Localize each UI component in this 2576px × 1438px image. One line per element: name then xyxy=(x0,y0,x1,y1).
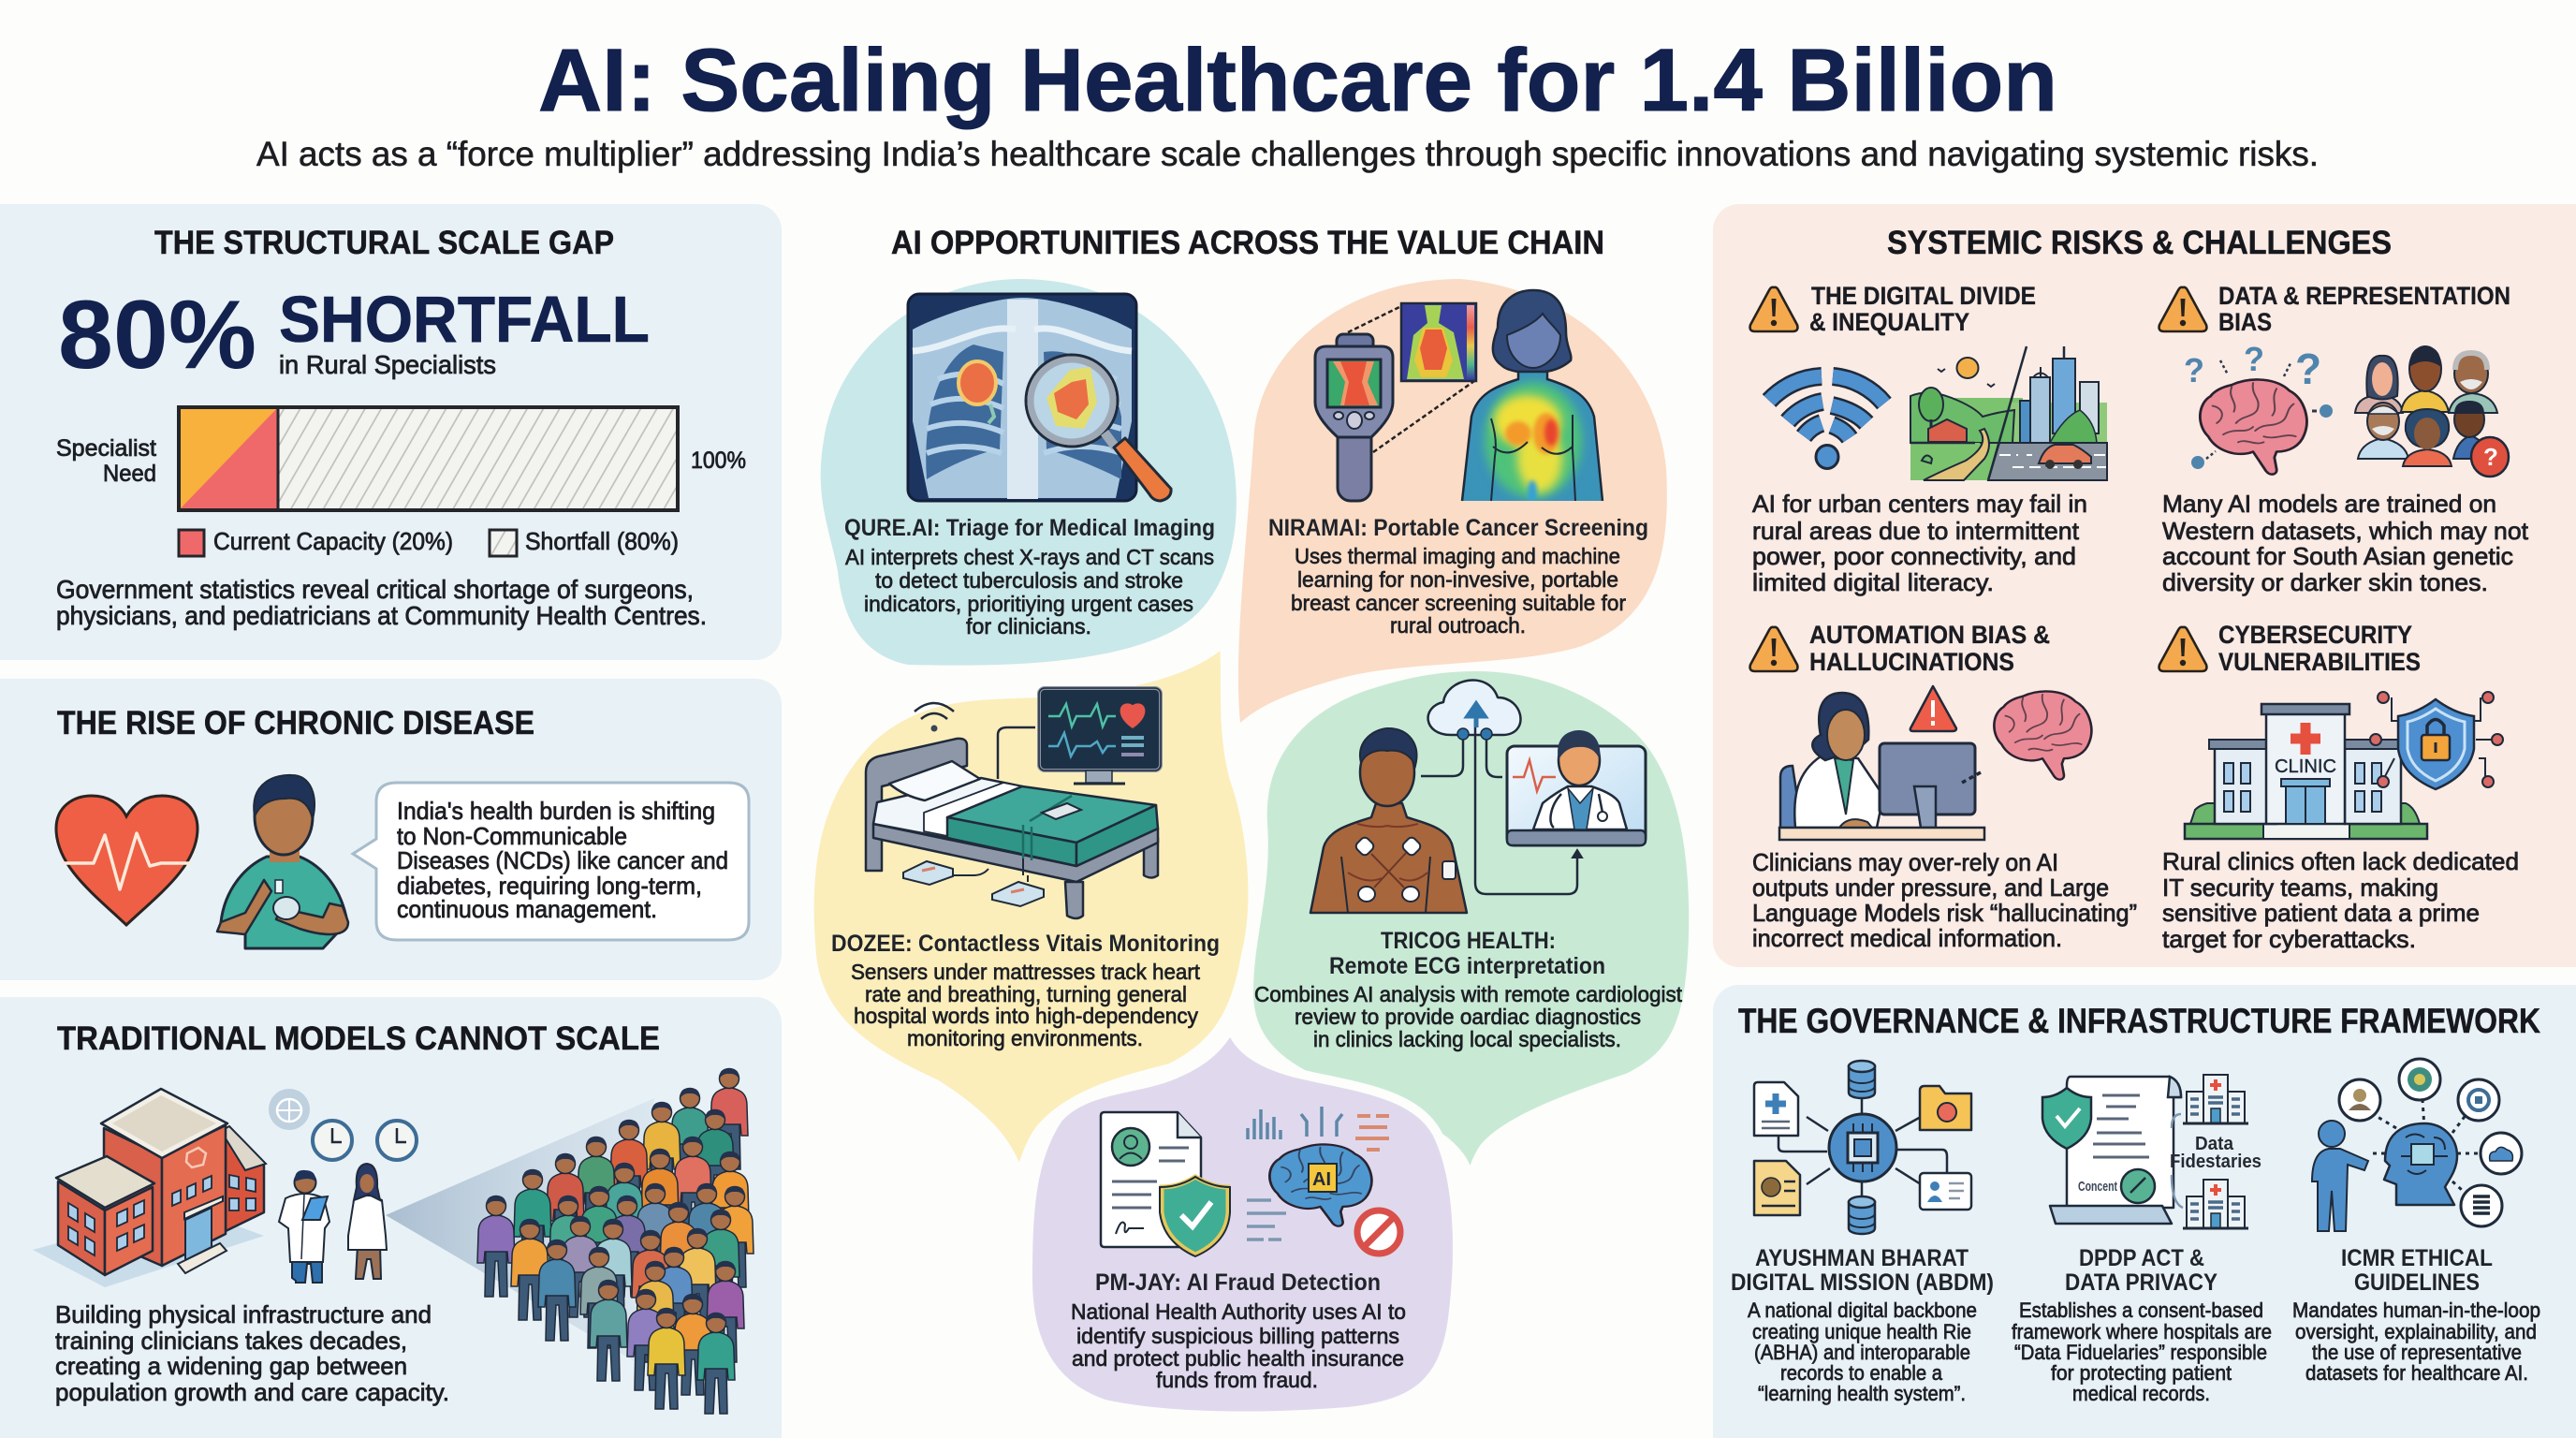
text: digital divide description: AI for urban centers may fail in xyxy=(1752,490,2087,518)
legend xyxy=(179,527,679,556)
icon: patient with ECG electrodes, cloud and remote cardiologist xyxy=(1310,680,1646,913)
text: ABDM title xyxy=(1731,1245,1994,1296)
text: DPDP title xyxy=(2065,1245,2217,1296)
subtitle: AI acts as a “force multiplier” addressing India’s healthcare scale challenges through specific innovations and navigating systemic risks. xyxy=(256,135,2319,173)
text: ABDM description: “learning health system”. xyxy=(1758,1382,1966,1405)
text: Niramai description: Uses thermal imaging and machine xyxy=(1295,544,1620,568)
text block: government statistics: Government statistics reveal critical shortage of surgeons, xyxy=(56,575,694,604)
text: digital divide description xyxy=(1752,490,2087,596)
text block: infrastructure takes decades: population growth and care capacity. xyxy=(55,1378,449,1406)
text block: infrastructure takes decades: Building physical infrastructure and xyxy=(55,1300,432,1328)
text: ABDM description: (ABHA) and interoparable xyxy=(1754,1341,1970,1364)
text: Qure.ai description: indicators, prioritiying urgent cases xyxy=(864,592,1193,616)
subheading xyxy=(1809,282,2036,336)
icon: consent document, shield and hospitals: Fidestaries xyxy=(2170,1152,2261,1172)
text block: infrastructure takes decades xyxy=(55,1300,449,1406)
subheading: & INEQUALITY xyxy=(1809,308,1969,336)
text: Tricog description: in clinics lacking local specialists. xyxy=(1313,1027,1621,1051)
icon: clock one xyxy=(313,1121,352,1160)
title: AI: Scaling Healthcare for 1.4 Billion xyxy=(538,31,2057,130)
icon: brain with question marks xyxy=(2184,340,2333,475)
icon: claim document with shield, AI brain and stop sign: AI xyxy=(1312,1169,1331,1190)
text: data bias description xyxy=(2162,490,2529,596)
icon: thermal camera and woman with heat map xyxy=(1315,290,1610,506)
icon: diverse group of people: ? xyxy=(2483,443,2498,471)
panel: PM-JAY xyxy=(1028,1027,1457,1416)
bar chart: specialist need xyxy=(179,407,678,510)
text: Niramai description: breast cancer screening suitable for xyxy=(1291,591,1626,615)
text: automation bias description: Language Models risk “hallucinating” xyxy=(1752,899,2137,927)
text: ABDM description: records to enable a xyxy=(1780,1361,1942,1385)
heading: AI opportunities: AI OPPORTUNITIES ACROSS THE VALUE CHAIN xyxy=(891,225,1604,261)
text: DPDP description: framework where hospitals are xyxy=(2012,1320,2272,1343)
text: digital divide description: power, poor connectivity, and xyxy=(1752,542,2076,570)
text: data bias description: diversity or darker skin tones. xyxy=(2162,568,2488,596)
text: PM-JAY description: funds from fraud. xyxy=(1156,1368,1318,1392)
column: ABDM xyxy=(1731,1061,1994,1405)
text: Niramai title: NIRAMAI: Portable Cancer Screening xyxy=(1268,515,1648,541)
text block: government statistics: physicians, and pediatricians at Community Health Centres. xyxy=(56,601,707,630)
text: Dozee description: Sensers under mattresses track heart xyxy=(851,960,1200,984)
column: ICMR guidelines xyxy=(2292,1059,2540,1385)
icon: clinic with security shield: CLINIC xyxy=(2275,756,2336,777)
stat: 80%: 80% xyxy=(58,281,256,389)
text: PM-JAY description: National Health Authority uses AI to xyxy=(1071,1299,1406,1324)
text: Niramai description xyxy=(1291,544,1626,638)
text: digital divide description: rural areas due to intermittent xyxy=(1752,517,2080,545)
text: ICMR title: ICMR ETHICAL xyxy=(2341,1245,2493,1271)
icon: diverse group of people xyxy=(2355,346,2509,477)
text: ICMR description: Mandates human-in-the-loop xyxy=(2292,1299,2540,1322)
icon: claim document with shield, AI brain and stop sign xyxy=(1101,1107,1400,1256)
icon: patient with medicine xyxy=(217,775,348,948)
text: Qure.ai description: for clinicians. xyxy=(966,614,1091,638)
text: ICMR description: datasets for healthcare AI. xyxy=(2305,1361,2528,1385)
text: Qure.ai description: to detect tuberculosis and stroke xyxy=(875,568,1183,593)
icon: warning triangle xyxy=(1750,627,1797,671)
risk: cybersecurity vulnerabilities xyxy=(2159,621,2519,953)
risk: data and representation bias xyxy=(2159,282,2529,596)
legend: Shortfall (80%) xyxy=(525,527,679,555)
icon: clinician at computer with warning and brain xyxy=(1779,686,2091,840)
icon: chest x-ray with magnifier xyxy=(908,294,1171,501)
icon: hospital building xyxy=(33,1089,266,1287)
callout: health burden: Diseases (NCDs) like cancer and xyxy=(397,846,728,874)
text: cybersecurity description: target for cyberattacks. xyxy=(2162,925,2416,953)
text: ICMR title: GUIDELINES xyxy=(2354,1269,2480,1296)
subheading: HALLUCINATIONS xyxy=(1809,648,2014,676)
column: DPDP Act xyxy=(2012,1075,2272,1405)
text block: infrastructure takes decades: training clinicians takes decades, xyxy=(55,1327,407,1355)
icon: consent document, shield and hospitals: Data xyxy=(2195,1134,2234,1154)
text: Tricog description: review to provide oardiac diagnostics xyxy=(1295,1005,1641,1029)
text: cybersecurity description: sensitive patient data a prime xyxy=(2162,899,2480,927)
subheading xyxy=(1809,621,2050,676)
icon: clock two xyxy=(377,1121,417,1160)
text: ICMR description xyxy=(2292,1299,2540,1385)
text: ABDM title: DIGITAL MISSION (ABDM) xyxy=(1731,1269,1994,1296)
text: ABDM description xyxy=(1748,1299,1977,1405)
callout: health burden: India's health burden is shifting xyxy=(397,797,715,825)
text: DPDP description xyxy=(2012,1299,2272,1405)
icon: brain with question marks: ? xyxy=(2295,345,2321,393)
text: Tricog title: Remote ECG interpretation xyxy=(1329,953,1605,979)
icon: warning triangle xyxy=(2159,287,2206,331)
text: Qure.ai description: AI interprets chest X-rays and CT scans xyxy=(845,545,1214,569)
subheading: DATA & REPRESENTATION xyxy=(2218,282,2510,310)
text: cybersecurity description: Rural clinics often lack dedicated xyxy=(2162,847,2519,875)
text: Dozee title: DOZEE: Contactless Vitais Monitoring xyxy=(831,931,1220,957)
text: DPDP title: DPDP ACT & xyxy=(2079,1245,2204,1271)
panel: the structural scale gap xyxy=(0,204,782,660)
icon: consent document, shield and hospitals xyxy=(2042,1075,2261,1228)
icon: warning triangle xyxy=(2159,627,2206,671)
panel: governance and infrastructure framework xyxy=(1713,985,2576,1438)
text: DPDP description: for protecting patient xyxy=(2051,1361,2232,1385)
icon: human in the loop with AI head xyxy=(2312,1059,2522,1231)
stat caption: in Rural Specialists xyxy=(279,350,496,379)
text: DPDP description: Establishes a consent-based xyxy=(2019,1299,2263,1322)
text: ABDM description: creating unique health Rie xyxy=(1752,1320,1971,1343)
text: ICMR description: the use of representative xyxy=(2312,1341,2522,1364)
panel: systemic risks and challenges xyxy=(1713,204,2576,967)
panel: traditional models cannot scale xyxy=(0,997,782,1438)
icon: male doctor xyxy=(279,1170,329,1283)
text: DPDP title: DATA PRIVACY xyxy=(2065,1269,2217,1296)
heading: systemic risks: SYSTEMIC RISKS & CHALLENGES xyxy=(1887,225,2392,261)
heading: structural scale gap: THE STRUCTURAL SCALE GAP xyxy=(154,225,614,261)
text: Tricog description: Combines AI analysis with remote cardiologist xyxy=(1254,982,1682,1006)
risk: digital divide xyxy=(1750,282,2107,596)
text: automation bias description: Clinicians may over-rely on AI xyxy=(1752,848,2058,876)
panel: Tricog Health xyxy=(1250,668,1692,1180)
text: Tricog title xyxy=(1329,928,1605,979)
icon: rural and urban divide scene xyxy=(1910,346,2107,480)
text: cybersecurity description: IT security teams, making xyxy=(2162,873,2438,902)
subheading: AUTOMATION BIAS & xyxy=(1809,621,2050,649)
text: DPDP description: “Data Fiduelaries” responsible xyxy=(2014,1341,2267,1364)
bar label: 100%: 100% xyxy=(691,448,746,474)
text: ICMR description: oversight, explainability, and xyxy=(2295,1320,2537,1343)
text: automation bias description xyxy=(1752,848,2137,952)
panel: the rise of chronic disease xyxy=(0,679,782,980)
text: Niramai description: learning for non-invesive, portable xyxy=(1297,567,1618,592)
text: Niramai description: rural outroach. xyxy=(1390,613,1526,638)
text: digital divide description: limited digital literacy. xyxy=(1752,568,1994,596)
subheading xyxy=(2218,282,2510,336)
panel: Dozee xyxy=(811,643,1251,1174)
callout: health burden: continuous management. xyxy=(397,895,657,923)
callout: health burden: diabetes, requiring long-term, xyxy=(397,872,702,900)
text: Dozee description: monitoring environments. xyxy=(907,1026,1143,1050)
text: Qure.ai title: QURE.AI: Triage for Medical Imaging xyxy=(844,515,1215,541)
text: Tricog title: TRICOG HEALTH: xyxy=(1381,928,1556,954)
text: Dozee description: hospital words into high-dependency xyxy=(854,1004,1198,1028)
text: Dozee description: rate and breathing, turning general xyxy=(865,982,1187,1006)
icon: brain with question marks: ? xyxy=(2244,340,2264,378)
text: DPDP description: medical records. xyxy=(2072,1382,2210,1405)
callout: health burden xyxy=(353,783,749,940)
subheading: VULNERABILITIES xyxy=(2218,648,2421,676)
bar label: specialist need xyxy=(56,435,156,487)
bar label: specialist need: Specialist xyxy=(56,435,156,462)
heading: traditional models: TRADITIONAL MODELS CANNOT SCALE xyxy=(57,1020,660,1057)
panel: Niramai xyxy=(1238,279,1667,723)
text: PM-JAY description: identify suspicious billing patterns xyxy=(1076,1324,1399,1348)
subheading: BIAS xyxy=(2218,308,2272,336)
text: ABDM title: AYUSHMAN BHARAT xyxy=(1755,1245,1969,1271)
heading: chronic disease: THE RISE OF CHRONIC DISEASE xyxy=(57,705,534,741)
text: ICMR title xyxy=(2341,1245,2493,1296)
illustration: crowd of people xyxy=(477,1068,754,1414)
callout: health burden: to Non-Communicable xyxy=(397,822,627,850)
subheading: CYBERSECURITY xyxy=(2218,621,2412,649)
text block: government statistics xyxy=(56,575,707,630)
bar label: specialist need: Need xyxy=(103,461,156,487)
text: cybersecurity description xyxy=(2162,847,2519,953)
subheading: THE DIGITAL DIVIDE xyxy=(1811,282,2036,310)
icon: warning triangle xyxy=(1750,287,1797,331)
icon: hospital bed with sensors and monitor xyxy=(866,688,1161,918)
subheading xyxy=(2218,621,2421,676)
text block: infrastructure takes decades: creating a widening gap between xyxy=(55,1352,407,1380)
icon: broken wifi xyxy=(1769,376,1884,468)
panel: Qure.ai xyxy=(821,279,1237,666)
beam: gap between capacity and population xyxy=(386,1098,654,1367)
icon: brain with question marks: ? xyxy=(2184,351,2204,389)
icon: clinic with security shield xyxy=(2185,692,2503,839)
icon: consent document, shield and hospitals: Concent xyxy=(2078,1179,2117,1195)
stat label: shortfall: SHORTFALL xyxy=(279,283,650,356)
legend: Current Capacity (20%) xyxy=(213,527,453,555)
text: automation bias description: incorrect medical information. xyxy=(1752,924,2062,952)
text: PM-JAY title: PM-JAY: AI Fraud Detection xyxy=(1095,1269,1381,1296)
text: Qure.ai description xyxy=(845,545,1214,638)
text: ABDM description: A national digital backbone xyxy=(1748,1299,1977,1322)
icon: female doctor xyxy=(348,1164,387,1279)
text: PM-JAY description: and protect public health insurance xyxy=(1072,1346,1404,1371)
text: data bias description: Many AI models are trained on xyxy=(2162,490,2496,518)
text: Tricog description xyxy=(1254,982,1682,1051)
text: data bias description: Western datasets, which may not xyxy=(2162,517,2529,545)
text: Dozee description xyxy=(851,960,1200,1050)
icon: digital health hub network xyxy=(1754,1061,1971,1234)
text: PM-JAY description xyxy=(1071,1299,1406,1392)
icon: global badge xyxy=(269,1089,310,1130)
text: automation bias description: outputs under pressure, and Large xyxy=(1752,873,2109,902)
icon: heart with ecg xyxy=(56,796,198,925)
text: data bias description: account for South Asian genetic xyxy=(2162,542,2513,570)
risk: automation bias and hallucinations xyxy=(1750,621,2137,952)
